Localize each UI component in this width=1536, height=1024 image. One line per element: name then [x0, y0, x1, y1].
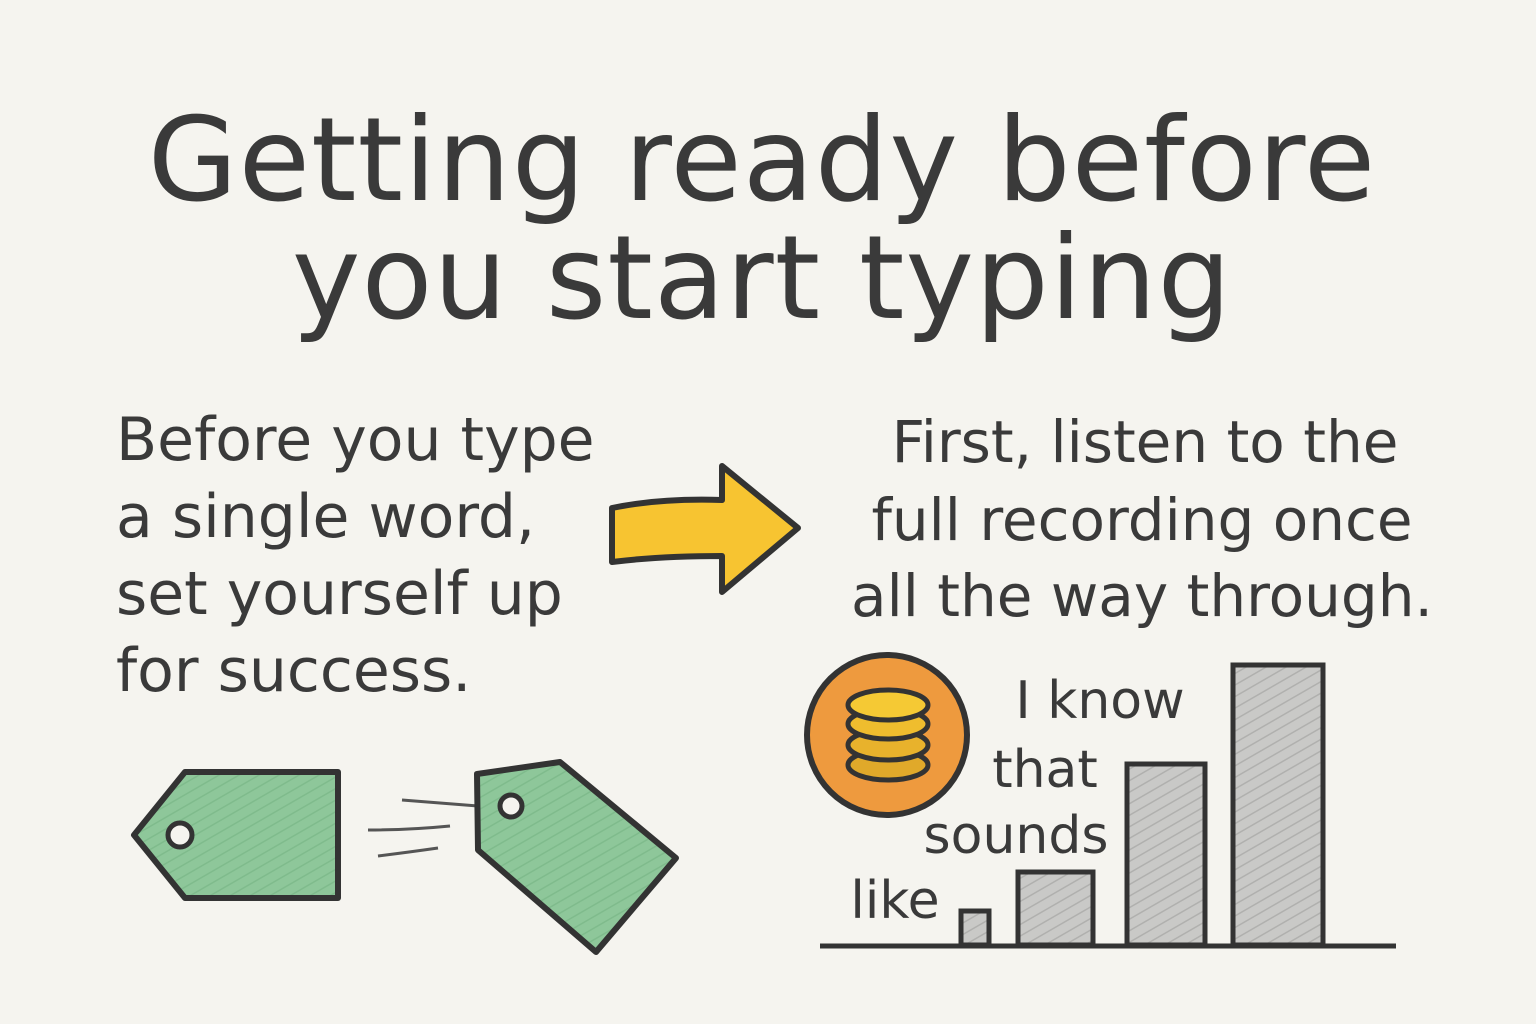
icon: price tag right (flying): [477, 762, 676, 952]
text block: right instruction: [851, 408, 1433, 630]
title: you start typing: [292, 211, 1232, 346]
bar chart: [820, 665, 1396, 946]
chart labels: I know: [1015, 671, 1185, 731]
motion lines: [368, 800, 478, 856]
chart labels: [850, 671, 1185, 931]
text block: left intro: [116, 405, 595, 706]
arrow: [612, 466, 798, 592]
text block: left intro: for success.: [116, 636, 471, 706]
text block: left intro: Before you type: [116, 405, 595, 475]
text block: left intro: set yourself up: [116, 559, 563, 629]
text block: right instruction: full recording once: [871, 486, 1413, 554]
text block: right instruction: all the way through.: [851, 562, 1433, 630]
text block: left intro: a single word,: [116, 482, 535, 552]
text block: right instruction: First, listen to the: [892, 408, 1398, 476]
title: [148, 93, 1376, 346]
icon: price tag left: [134, 772, 338, 898]
chart labels: like: [850, 871, 940, 931]
icon: coins: [807, 655, 967, 815]
chart labels: that: [992, 740, 1098, 800]
title: Getting ready before: [148, 93, 1376, 228]
chart labels: sounds: [924, 806, 1108, 866]
